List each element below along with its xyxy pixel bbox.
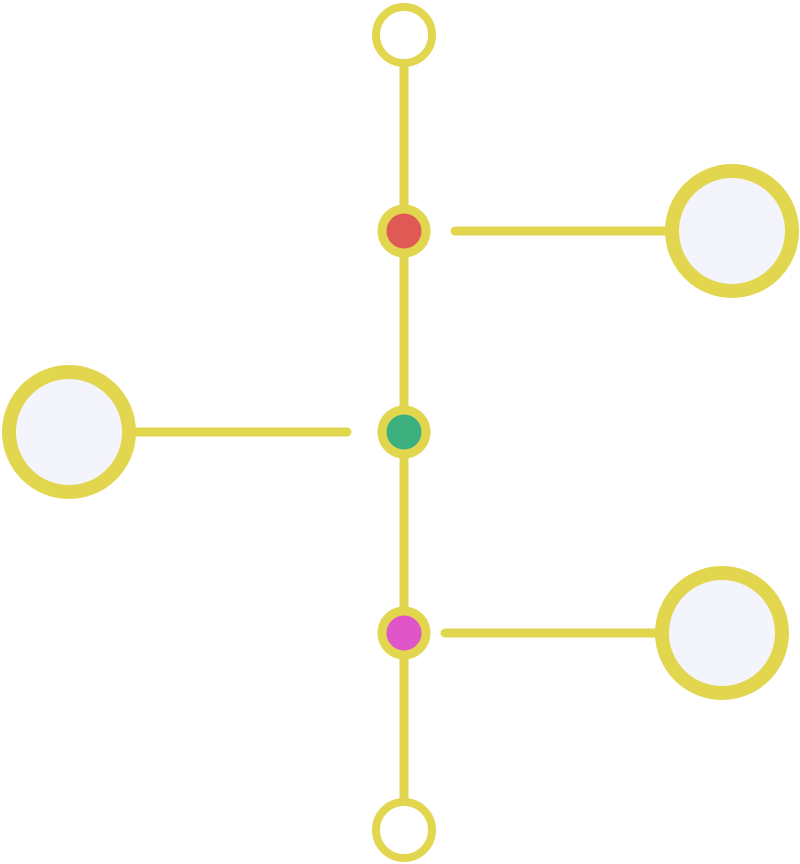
- large circle: left: [9, 372, 129, 492]
- large circle: right bottom: [662, 573, 782, 693]
- node: magenta: [382, 611, 426, 655]
- connector: green to left circle: [132, 428, 347, 436]
- connector: magenta to right circle: [445, 628, 660, 638]
- node: red: [382, 209, 426, 253]
- bottom endpoint circle: [376, 802, 432, 858]
- vertical spine: [400, 64, 408, 800]
- top endpoint circle: [376, 7, 432, 63]
- large circle: right top: [672, 171, 792, 291]
- node: green: [382, 410, 426, 454]
- connector: red to right circle: [455, 226, 672, 236]
